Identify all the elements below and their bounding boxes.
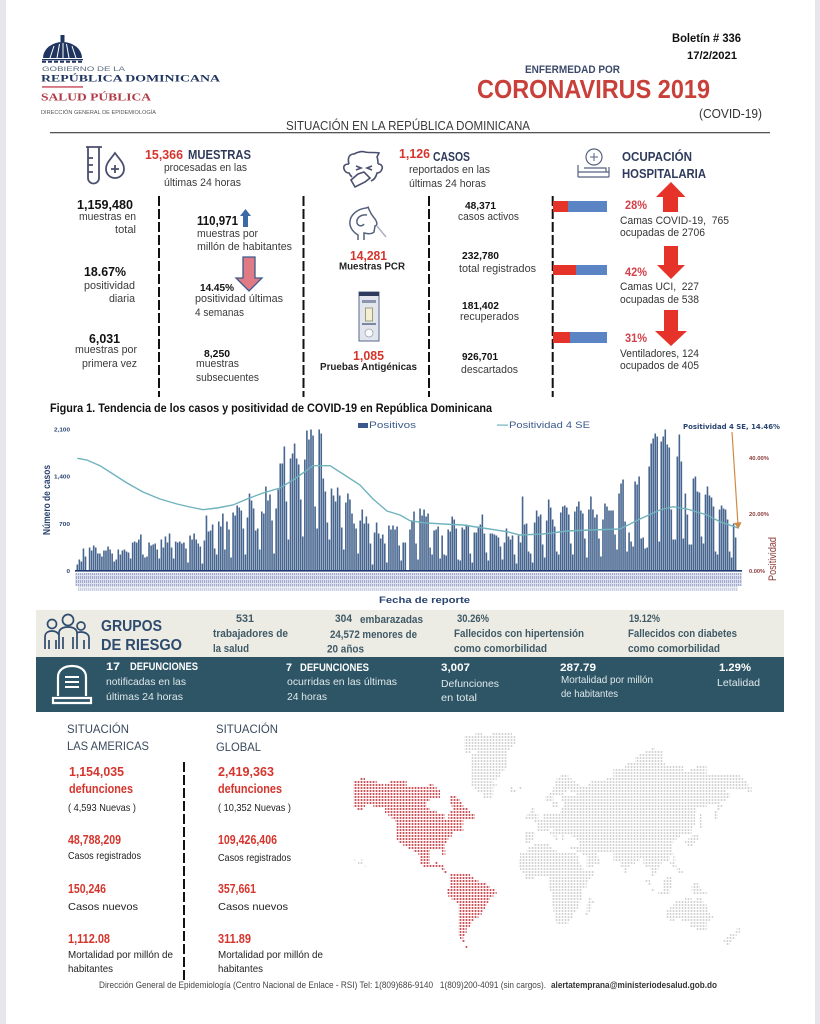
panel: defunciones: 287.79	[560, 662, 596, 674]
panel: defunciones: ocurridas en las últimas	[287, 676, 397, 688]
panel: ocupación hospitalaria: 31%	[625, 331, 647, 345]
panel: defunciones: 24 horas	[287, 691, 327, 703]
panel: casos: 181,402	[462, 301, 499, 312]
left axis	[41, 428, 70, 575]
panel: grupos de riesgo: 24,572 menores de	[330, 629, 417, 641]
panel: casos: 14,281	[350, 248, 387, 263]
section heading: SITUACIÓN EN LA REPÚBLICA DOMINICANA	[286, 118, 530, 133]
panel: muestras: muestras por	[197, 228, 258, 240]
panel: muestras: últimas 24 horas	[164, 177, 241, 189]
left axis: 2,100	[54, 428, 70, 434]
panel: muestras: muestras por	[75, 344, 137, 356]
right axis: 40.00%	[749, 456, 769, 462]
panel: ocupación hospitalaria: Camas COVID-19, 765	[620, 215, 729, 227]
right axis: 20.00%	[749, 512, 769, 518]
title	[477, 64, 762, 121]
panel: muestras: muestras	[196, 358, 239, 370]
panel: ocupación hospitalaria: HOSPITALARIA	[622, 166, 707, 181]
dashed column dividers	[159, 196, 553, 397]
panel: situación global: 2,419,363	[218, 764, 274, 779]
bar: camas UCI	[553, 265, 607, 275]
panel: situación global: 109,426,406	[218, 832, 277, 847]
panel: situación global: GLOBAL	[216, 740, 261, 754]
panel: muestras: MUESTRAS	[188, 147, 251, 162]
bar: ventiladores	[553, 332, 607, 343]
panel: grupos de riesgo: embarazadas	[360, 614, 423, 626]
panel: casos: CASOS	[433, 149, 470, 164]
panel: ocupación hospitalaria: 42%	[625, 265, 647, 279]
panel: grupos de riesgo: 19.12%	[629, 613, 660, 625]
panel: muestras: muestras en	[79, 211, 136, 223]
panel: situación global: Casos registrados	[218, 852, 291, 864]
panel: situación global: Mortalidad por millón de	[218, 949, 323, 961]
panel: muestras: 14.45%	[200, 283, 234, 294]
panel: situación Las Américas: 48,788,209	[68, 832, 121, 847]
panel: situación global: ( 10,352 Nuevas )	[218, 802, 291, 814]
panel: ocupación hospitalaria: OCUPACIÓN	[622, 149, 692, 164]
panel: situación Las Américas: 150,246	[68, 881, 106, 896]
panel: grupos de riesgo: trabajadores de	[213, 628, 288, 640]
left axis: 0	[66, 569, 70, 575]
panel: casos	[320, 146, 536, 376]
panel: muestras: 6,031	[89, 332, 120, 346]
panel: defunciones: en total	[441, 692, 477, 704]
x axis title: Fecha de reporte	[379, 595, 470, 605]
legend: Positividad 4 SE	[509, 420, 590, 430]
panel: muestras: 110,971	[197, 214, 238, 228]
panel: casos: 232,780	[462, 251, 499, 262]
bar: camas COVID-19	[553, 201, 607, 212]
panel: situación Las Américas	[67, 721, 173, 975]
panel: situación global: SITUACIÓN	[216, 721, 278, 736]
panel: ocupación hospitalaria: Camas UCI, 227	[620, 281, 699, 293]
panel: defunciones: Defunciones	[441, 678, 499, 690]
panel: casos: descartados	[461, 364, 518, 376]
panel: ocupación hospitalaria	[553, 149, 729, 372]
panel: situación Las Américas: Casos nuevos	[68, 901, 138, 913]
panel: defunciones: 1.29%	[719, 662, 751, 674]
panel: muestras: positividad últimas	[195, 293, 283, 305]
panel: situación global	[216, 721, 323, 975]
panel: defunciones: últimas 24 horas	[106, 691, 183, 703]
callout: positividad 14.46%	[683, 423, 780, 529]
panel: grupos de riesgo: 531	[236, 613, 254, 625]
map: the Americas in red	[353, 779, 497, 947]
panel: defunciones: notificadas en las	[106, 676, 186, 688]
panel: casos: 1,126	[399, 146, 430, 161]
panel: muestras: 18.67%	[84, 265, 126, 279]
panel: situación Las Américas: ( 4,593 Nuevas )	[68, 802, 136, 814]
panel: grupos de riesgo	[36, 610, 784, 657]
panel: grupos de riesgo: 304	[335, 613, 353, 625]
bars: casos positivos	[77, 430, 736, 570]
panel: muestras: 15,366	[145, 147, 183, 162]
panel: defunciones: Letalidad	[717, 677, 760, 689]
panel: defunciones: Mortalidad por millón	[561, 674, 653, 686]
right axis	[749, 456, 779, 581]
callout: positividad 14.46%: Positividad 4 SE, 14.46%	[683, 423, 780, 431]
icon: antigen test cassette	[359, 292, 379, 341]
panel: muestras: 8,250	[204, 349, 230, 360]
icon: pink down arrow	[236, 257, 262, 291]
icon: face with mask	[344, 152, 382, 187]
panel: casos: 48,371	[465, 201, 496, 212]
title: CORONAVIRUS 2019	[477, 74, 710, 104]
panel: ocupación hospitalaria: 28%	[625, 198, 647, 212]
panel: situación Las Américas: Casos registrados	[68, 850, 141, 862]
panel: situación Las Américas: habitantes	[68, 963, 113, 975]
panel: muestras: millón de habitantes	[197, 241, 292, 253]
bulletin number and date: 17/2/2021	[687, 50, 737, 62]
panel: situación Las Américas: Mortalidad por millón de	[68, 949, 173, 961]
logo: Gobierno de la República Dominicana, Salud Pública: DIRECCIÓN GENERAL DE EPIDEMIOLOGÍA	[41, 109, 156, 116]
panel: situación global: habitantes	[218, 963, 263, 975]
panel: situación global: defunciones	[218, 781, 282, 796]
panel: muestras: diaria	[109, 293, 136, 305]
title: (COVID-19)	[699, 107, 762, 121]
map: rest of world in grey	[353, 734, 752, 944]
bulletin number and date: Boletín # 336	[672, 33, 741, 45]
panel: muestras: procesadas en las	[164, 162, 247, 174]
panel: grupos de riesgo: Fallecidos con diabetes	[628, 628, 737, 640]
line: positividad 4 SE	[77, 458, 738, 535]
panel: muestras: primera vez	[82, 358, 137, 370]
panel: situación global: 311.89	[218, 931, 251, 946]
logo: Gobierno de la República Dominicana, Salud Pública: REPÚBLICA DOMINICANA	[41, 72, 220, 84]
footer: alertatemprana@ministeriodesalud.gob.do	[551, 980, 717, 990]
panel: casos: Muestras PCR	[339, 260, 405, 272]
panel: defunciones: de habitantes	[561, 688, 618, 700]
panel: muestras	[75, 147, 292, 384]
panel: defunciones	[36, 657, 784, 712]
legend	[358, 420, 590, 430]
logo: Gobierno de la República Dominicana, Salud Pública	[41, 35, 220, 116]
arrow: up	[656, 182, 686, 212]
panel: ocupación hospitalaria: ocupadas de 538	[620, 294, 699, 306]
icon: test tube and drop	[86, 147, 124, 184]
title: ENFERMEDAD POR	[525, 64, 620, 76]
right axis: 0.00%	[749, 569, 765, 575]
date labels band	[75, 573, 742, 591]
panel: casos: total registrados	[459, 263, 536, 275]
icon: tombstone	[53, 666, 91, 703]
panel: casos: 1,085	[353, 348, 384, 363]
icon: people	[45, 614, 89, 649]
left axis: Número de casos	[41, 465, 53, 535]
panel: situación Las Américas: LAS AMERICAS	[67, 739, 149, 753]
panel: situación Las Américas: SITUACIÓN	[67, 721, 129, 736]
panel: casos: reportados en las	[409, 164, 490, 176]
logo: Gobierno de la República Dominicana, Salud Pública: GOBIERNO DE LA	[42, 67, 125, 73]
panel: situación global: 357,661	[218, 881, 256, 896]
panel: muestras: 1,159,480	[77, 198, 133, 212]
panel: grupos de riesgo: la salud	[213, 643, 249, 655]
right axis: Positividad	[767, 537, 779, 581]
panel: ocupación hospitalaria: ocupadas de 2706	[620, 227, 705, 239]
panel: ocupación hospitalaria: ocupados de 405	[620, 360, 699, 372]
panel: defunciones: 17	[106, 661, 120, 673]
icon: nasal swab	[350, 207, 386, 240]
dashed divider	[183, 762, 185, 980]
panel: situación Las Américas: 1,112.08	[68, 931, 110, 946]
arrow: down	[657, 246, 685, 279]
panel: grupos de riesgo: 20 años	[327, 644, 364, 656]
panel: grupos de riesgo: como comorbilidad	[454, 643, 547, 655]
panel: ocupación hospitalaria: Ventiladores, 124	[620, 348, 699, 360]
panel: situación Las Américas: defunciones	[69, 781, 133, 796]
panel: defunciones: DEFUNCIONES	[130, 661, 198, 673]
left axis: 1,400	[54, 474, 70, 480]
panel: muestras: 4 semanas	[195, 307, 244, 319]
panel: situación global: Casos nuevos	[218, 901, 288, 913]
panel: muestras: total	[115, 224, 136, 236]
panel: grupos de riesgo: GRUPOS	[101, 618, 162, 635]
panel: muestras: positividad	[84, 280, 135, 292]
icon: dome	[42, 35, 83, 62]
left axis: 700	[59, 522, 70, 528]
panel: grupos de riesgo: DE RIESGO	[101, 637, 182, 654]
panel: grupos de riesgo: como comorbilidad	[628, 643, 720, 655]
panel: casos: Pruebas Antigénicas	[320, 361, 417, 373]
icon: up arrow	[240, 209, 251, 227]
panel: casos: recuperados	[460, 311, 519, 323]
panel: casos: últimas 24 horas	[409, 178, 486, 190]
axis baseline	[75, 570, 742, 572]
world dot map	[353, 734, 752, 947]
panel: grupos de riesgo: 30.26%	[457, 613, 489, 625]
panel: casos: 926,701	[462, 352, 498, 363]
panel: situación Las Américas: 1,154,035	[69, 764, 124, 779]
chart: tendencia de casos y positividad	[41, 420, 780, 605]
arrow: down	[655, 310, 687, 346]
legend: Positivos	[369, 420, 417, 430]
icon: hospital bed	[578, 149, 609, 177]
panel: casos: casos activos	[458, 211, 519, 223]
panel: grupos de riesgo: Fallecidos con hipertensión	[454, 628, 584, 640]
bulletin number and date	[672, 33, 741, 62]
panel: defunciones: 3,007	[441, 662, 470, 674]
logo: Gobierno de la República Dominicana, Salud Pública: SALUD PÚBLICA	[41, 92, 152, 104]
chart heading: Figura 1. Tendencia de los casos y positividad de COVID-19 en República Dominicana	[50, 403, 493, 415]
panel: defunciones: DEFUNCIONES	[300, 662, 369, 674]
panel: muestras: subsecuentes	[196, 372, 259, 384]
panel: defunciones: 7	[286, 662, 292, 674]
footer: Dirección General de Epidemiología (Centro Nacional de Enlace - RSI) Tel: 1(809)686-9140 1(809)200-4091 (sin cargos).	[99, 980, 546, 990]
